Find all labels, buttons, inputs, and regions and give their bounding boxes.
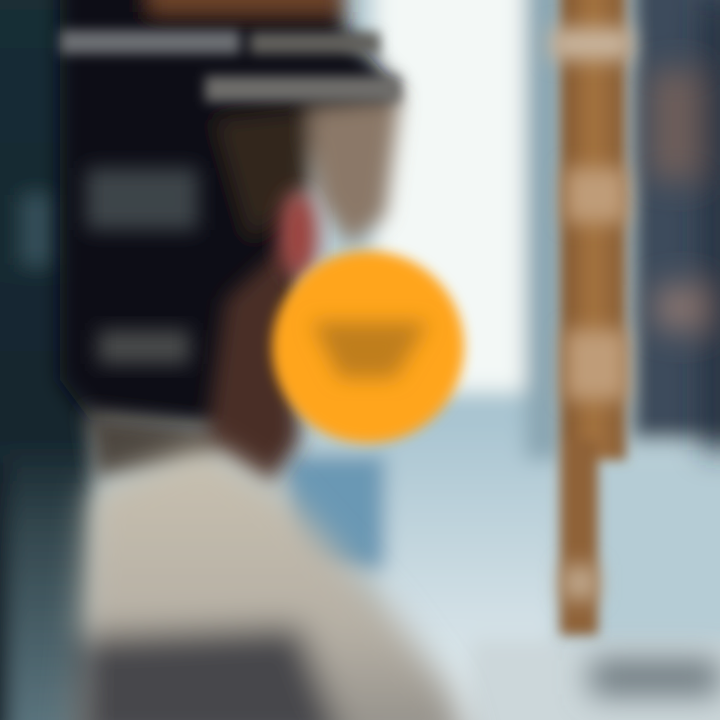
right figure	[590, 0, 720, 695]
yellow badge	[272, 251, 464, 443]
blurred text block upper	[86, 168, 198, 230]
blurred text block lower	[98, 330, 190, 364]
wooden post	[560, 0, 626, 635]
hair and head	[60, 0, 400, 430]
neck	[85, 240, 300, 485]
sweater	[70, 445, 470, 720]
blurred labels on post	[550, 28, 632, 600]
ear	[278, 191, 318, 279]
icon: basket	[312, 322, 428, 378]
left dark strip	[0, 0, 95, 720]
blurred title	[60, 30, 400, 102]
